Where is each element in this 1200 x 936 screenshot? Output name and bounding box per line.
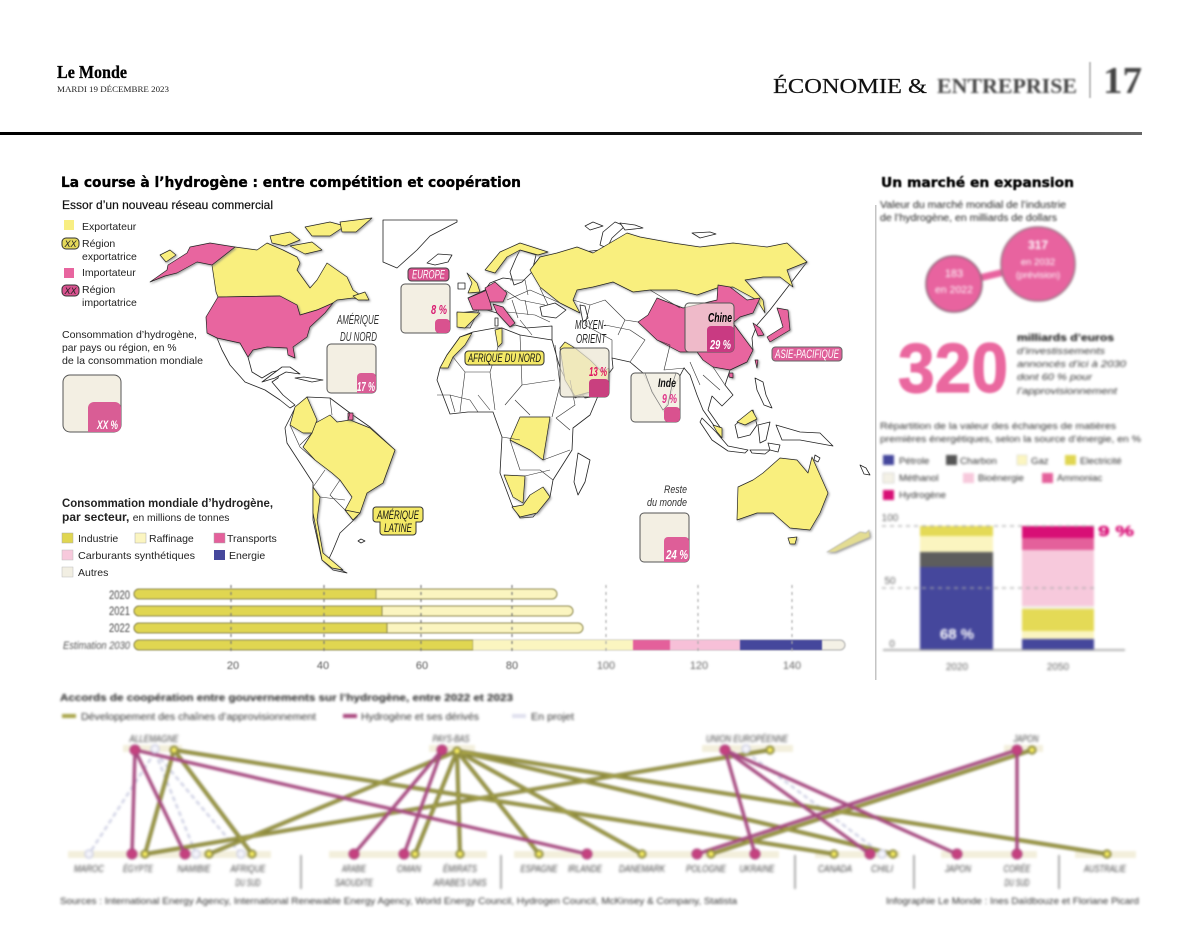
bottom labels: ÉMIRATS	[443, 862, 477, 875]
inset: Reste du monde: Reste	[664, 484, 687, 496]
hydrogen links	[132, 750, 1017, 854]
energy legend: Gaz	[1031, 456, 1049, 467]
stacked bar chart 2020 vs 2050	[882, 513, 1134, 673]
bubbles: market 2022 vs 2032: (prévision)	[1016, 270, 1060, 281]
bar chart: hydrogen consumption by sector: 40	[317, 660, 329, 672]
land: neutral countries	[217, 220, 870, 573]
market value description: de l’hydrogène, en milliards de dollars	[880, 213, 1057, 224]
bar chart: hydrogen consumption by sector: 60	[416, 660, 428, 672]
bar chart: hydrogen consumption by sector: 2022	[109, 623, 130, 635]
label: Afrique du Nord	[465, 351, 544, 365]
consumption key text: de la consommation mondiale	[62, 356, 203, 367]
bottom labels: DU SUD	[236, 878, 260, 889]
energy legend: Electricité	[1080, 456, 1122, 467]
consumption key text	[62, 330, 203, 367]
bar chart: hydrogen consumption by sector: 140	[783, 660, 801, 672]
energy legend: Bioénergie	[978, 473, 1024, 484]
sector legend: Carburants synthétiques	[78, 550, 195, 562]
bottom labels: POLOGNE	[686, 864, 726, 875]
bottom labels: DANEMARK	[619, 864, 666, 875]
map legend: exportatrice	[82, 251, 137, 263]
stacked bar chart 2020 vs 2050: 2050	[1047, 662, 1070, 673]
investment text: d’investissements	[1017, 346, 1105, 357]
label: Amérique latine: LATINE	[384, 523, 412, 535]
masthead: Le Monde and date: Le Monde	[57, 62, 127, 82]
big number: 320: 320	[898, 329, 1008, 407]
market value description: Valeur du marché mondial de l’industrie	[880, 200, 1066, 211]
bottom labels: ÉGYPTE	[123, 862, 153, 875]
energy legend: Ammoniac	[1057, 473, 1103, 484]
label: Asie-Pacifique	[772, 347, 842, 361]
sector legend: Energie	[229, 550, 265, 562]
sector legend	[62, 533, 277, 579]
bottom labels: JAPON	[944, 864, 972, 875]
title: La course à l’hydrogène : entre compétition et coopération	[61, 175, 521, 191]
stacked bar chart 2020 vs 2050: 100	[882, 513, 899, 524]
map legend	[62, 220, 137, 309]
bottom nodes	[85, 849, 1111, 859]
supply-chain links	[145, 750, 1107, 854]
inset: Moyen-Orient	[560, 318, 609, 397]
energy legend	[883, 455, 1122, 501]
inset: Moyen-Orient: MOYEN-	[575, 318, 606, 332]
sector chart heading	[62, 496, 273, 524]
energy legend: Méthanol	[899, 473, 938, 484]
sector legend: Transports	[227, 533, 277, 545]
national borders	[290, 280, 725, 510]
sources: Sources : International Energy Agency, International Renewable Energy Agency, World Energy Council, Hydrogen Council, McKinsey & Company, Statista	[60, 896, 738, 907]
cooperation legend: Développement des chaînes d’approvisionnement	[81, 712, 316, 723]
consumption key box	[63, 375, 121, 432]
investment text: dont 60 % pour	[1017, 372, 1093, 383]
top labels: UNION EUROPÉENNE	[706, 732, 788, 745]
energy trade description: premières énergétiques, selon la source d’énergie, en %	[880, 434, 1142, 445]
energy legend: Pétrole	[899, 456, 929, 467]
section heading: Économie & Entreprise, page 17: 17	[1103, 60, 1142, 102]
inset: Moyen-Orient: ORIENT	[576, 332, 607, 346]
bottom labels: ESPAGNE	[520, 864, 558, 875]
inset: Amérique du Nord	[327, 312, 379, 394]
map legend: Région	[82, 238, 115, 250]
consumption key text: par pays ou région, en %	[62, 343, 176, 354]
bubbles: market 2022 vs 2032: 317	[1028, 238, 1048, 252]
bottom labels: ARABES UNIS	[433, 878, 487, 889]
bottom labels: CANADA	[818, 864, 852, 875]
bottom labels: DU SUD	[1004, 878, 1030, 889]
sector chart heading: par secteur, en millions de tonnes	[62, 510, 229, 524]
cooperation legend: En projet	[531, 712, 574, 723]
bar chart: hydrogen consumption by sector: 100	[597, 660, 615, 672]
market value description	[880, 200, 1066, 224]
consumption key box: XX %	[96, 418, 118, 432]
bubbles: market 2022 vs 2032: en 2022	[935, 284, 973, 296]
bar chart: hydrogen consumption by sector: 80	[506, 660, 518, 672]
stacked bar chart 2020 vs 2050: 2020	[946, 662, 969, 673]
bottom labels: ARABIE	[341, 864, 366, 875]
sector chart heading: Consommation mondiale d’hydrogène,	[62, 496, 273, 510]
bubbles: market 2022 vs 2032	[926, 227, 1075, 312]
inset: Reste du monde	[640, 484, 689, 562]
subtitle: map: Essor d’un nouveau réseau commercial	[62, 198, 273, 212]
inset: Inde: 9 %	[662, 392, 677, 406]
map legend: Importateur	[82, 267, 136, 279]
bottom labels: AUSTRALIE	[1083, 864, 1126, 875]
stacked bar chart 2020 vs 2050: 50	[884, 576, 896, 587]
bottom labels: AFRIQUE	[230, 864, 266, 875]
heading: Un marché en expansion: Un marché en expansion	[881, 176, 1074, 191]
stacked bar chart 2020 vs 2050: 0	[889, 639, 895, 650]
energy legend: Hydrogène	[899, 490, 946, 501]
energy legend: Charbon	[960, 456, 997, 467]
bottom labels: CHILI	[871, 864, 893, 875]
world map	[150, 218, 870, 573]
sector legend: Industrie	[78, 533, 118, 545]
inset: Chine	[685, 303, 734, 352]
masthead: Le Monde and date	[57, 62, 169, 94]
section heading: Économie & Entreprise, page 17: ÉCONOMIE &	[773, 74, 927, 98]
inset: Chine: 29 %	[709, 337, 731, 352]
map legend: importatrice	[82, 297, 137, 309]
bottom labels: SAOUDITE	[335, 878, 373, 889]
sector legend: Autres	[78, 567, 108, 579]
label: Amérique latine: AMÉRIQUE	[376, 509, 419, 522]
cooperation network diagram	[68, 732, 1136, 889]
bar chart: hydrogen consumption by sector: 2021	[109, 606, 130, 618]
bubbles: market 2022 vs 2032: en 2032	[1021, 257, 1055, 268]
bar chart: hydrogen consumption by sector: 2020	[109, 590, 130, 602]
energy trade description: Répartition de la valeur des échanges de matières	[880, 421, 1116, 432]
bands	[68, 745, 1136, 858]
consumption key text: Consommation d’hydrogène,	[62, 330, 197, 341]
label: Amérique latine	[373, 507, 423, 535]
label: Asie-Pacifique: ASIE-PACIFIQUE	[774, 349, 839, 361]
sector legend: Raffinage	[149, 533, 194, 545]
bottom labels: IRLANDE	[568, 864, 602, 875]
investment text	[1017, 332, 1127, 397]
top labels: ALLEMAGNE	[129, 734, 179, 745]
inset: Europe: EUROPE	[412, 270, 445, 282]
map legend: Exportateur	[82, 221, 137, 233]
land: exporter countries	[160, 218, 870, 570]
bottom labels	[74, 862, 1126, 889]
cooperation legend: Hydrogène et ses dérivés	[361, 712, 479, 723]
investment text: annoncés d’ici à 2030	[1017, 359, 1127, 370]
inset: Amérique du Nord: 17 %	[357, 380, 375, 394]
cooperation legend	[62, 712, 574, 723]
cooperation agreements heading: Accords de coopération entre gouvernements sur l’hydrogène, entre 2022 et 2023	[60, 692, 513, 704]
inset: Reste du monde: du monde	[647, 497, 687, 509]
inset: Moyen-Orient: 13 %	[589, 365, 607, 379]
investment text: milliards d’euros	[1017, 332, 1114, 344]
section heading: Économie & Entreprise, page 17	[773, 60, 1142, 102]
inset: Chine: Chine	[708, 311, 732, 325]
inset: Europe	[401, 268, 450, 333]
top labels	[129, 732, 1039, 745]
top labels: PAYS-BAS	[432, 734, 470, 745]
bottom labels: CORÉE	[1004, 862, 1031, 875]
energy trade description	[880, 421, 1142, 445]
top labels: JAPON	[1013, 734, 1039, 745]
investment text: l’approvisionnement	[1017, 386, 1117, 397]
inset: Europe: 8 %	[431, 303, 447, 317]
inset: Reste du monde: 24 %	[665, 548, 688, 562]
label: Afrique du Nord: AFRIQUE DU NORD	[467, 351, 541, 365]
bottom labels: OMAN	[397, 864, 422, 875]
bottom labels: UKRAINE	[740, 864, 775, 875]
land: importer countries	[150, 243, 790, 420]
inset: Amérique du Nord: DU NORD	[340, 330, 377, 344]
bottom labels: NAMIBIE	[178, 864, 211, 875]
bar chart: hydrogen consumption by sector: 20	[227, 660, 239, 672]
stacked bar chart 2020 vs 2050: 9 %	[1098, 523, 1134, 540]
inset: Inde	[631, 373, 680, 422]
bubbles: market 2022 vs 2032: 183	[945, 268, 963, 280]
bar chart: hydrogen consumption by sector	[63, 585, 845, 672]
credit: Infographie Le Monde : Ines Daïdbouze et Floriane Picard	[886, 896, 1139, 907]
bar chart: hydrogen consumption by sector: 120	[690, 660, 708, 672]
divider column	[875, 205, 876, 680]
planned links	[89, 752, 882, 854]
section heading: Économie & Entreprise, page 17: ENTREPRISE	[937, 74, 1077, 98]
header rule	[0, 132, 1142, 135]
inset: Inde: Inde	[658, 376, 676, 390]
top nodes	[130, 745, 1036, 755]
inset: Amérique du Nord: AMÉRIQUE	[336, 312, 379, 327]
stacked bar chart 2020 vs 2050: 68 %	[940, 626, 974, 643]
map legend: XX	[63, 286, 77, 296]
bar chart: hydrogen consumption by sector: Estimation 2030	[63, 640, 131, 652]
masthead: Le Monde and date: MARDI 19 DÉCEMBRE 2023	[57, 84, 169, 94]
bottom labels: MAROC	[74, 864, 105, 875]
map legend: Région	[82, 284, 115, 296]
map legend: XX	[63, 239, 77, 249]
